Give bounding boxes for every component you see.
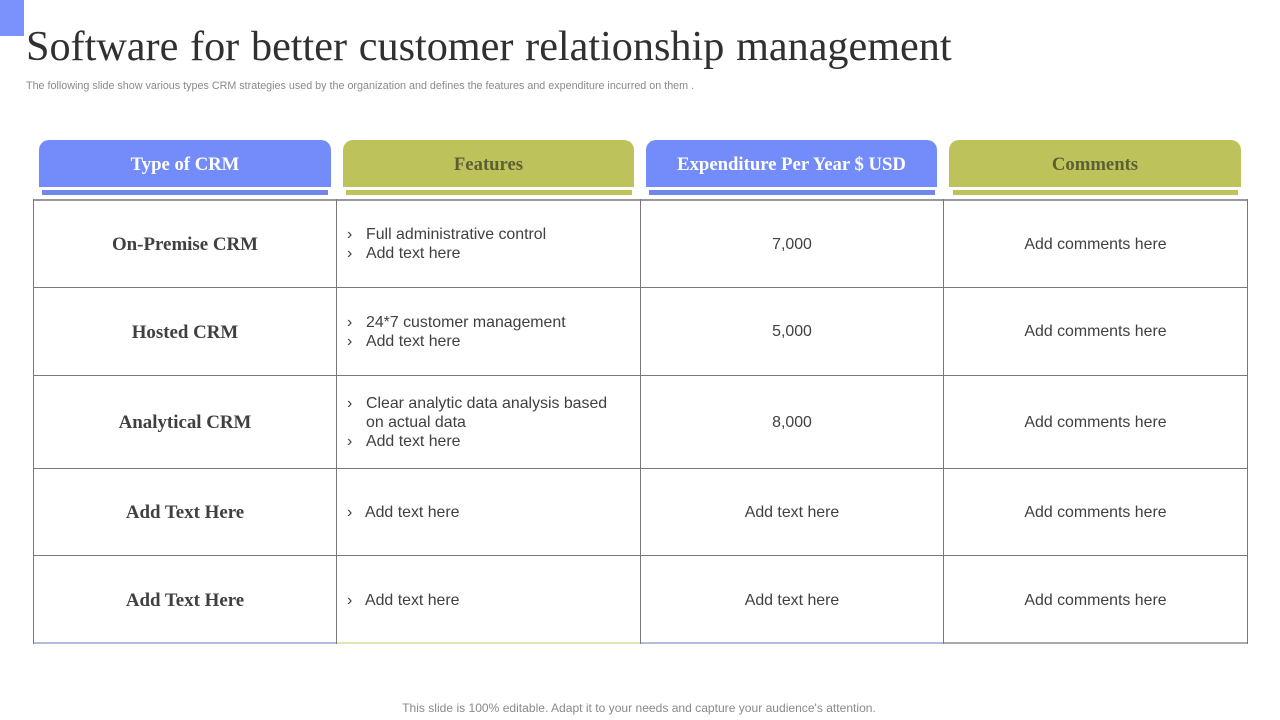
row 1 comments: Add comments here — [1024, 236, 1167, 253]
row 3 comments: Add comments here — [1024, 414, 1167, 431]
header underline: Features — [346, 190, 632, 195]
row 5 expenditure: Add text here — [745, 592, 839, 609]
header underline: Comments — [953, 190, 1238, 195]
header underline: Expenditure — [649, 190, 935, 195]
row 2 features — [347, 314, 566, 350]
row 1 expenditure: 7,000 — [772, 236, 812, 253]
subtitle: The following slide show various types CRM strategies used by the organization and defines the features and expenditure incurred on them . — [26, 80, 694, 92]
row 2 label: Hosted CRM — [132, 322, 238, 343]
corner accent — [0, 0, 24, 36]
header: Features: Features — [454, 154, 523, 175]
row 2 features: › — [347, 314, 352, 331]
row 5 features: Add text here — [365, 592, 460, 609]
header: Comments — [949, 140, 1241, 187]
row 3 expenditure: 8,000 — [772, 414, 812, 431]
row 2 expenditure: 5,000 — [772, 323, 812, 340]
header underline: Type of CRM — [42, 190, 328, 195]
row 1 features: › — [347, 245, 352, 262]
row 2 features: 24*7 customer management — [366, 314, 566, 331]
row 2 features: Add text here — [366, 333, 461, 350]
row 1 features — [347, 226, 546, 262]
row 1 features: Add text here — [366, 245, 461, 262]
row 4 comments: Add comments here — [1024, 504, 1167, 521]
row 3 features: on actual data — [366, 414, 466, 431]
row 4 features: › — [347, 504, 352, 521]
row 4 features: Add text here — [365, 504, 460, 521]
header: Type of CRM — [39, 140, 331, 187]
header: Features — [343, 140, 634, 187]
row 5 comments: Add comments here — [1024, 592, 1167, 609]
header: Type of CRM: Type of CRM — [131, 154, 239, 175]
row 3 features — [347, 395, 607, 450]
footer note: This slide is 100% editable. Adapt it to your needs and capture your audience's attention. — [402, 701, 876, 715]
row 3 features: › — [347, 395, 352, 412]
row 2 features: › — [347, 333, 352, 350]
header: Expenditure Per Year — [646, 140, 937, 187]
row 4 label: Add Text Here — [126, 502, 244, 523]
row 1 label: On-Premise CRM — [112, 234, 258, 255]
row 1 features: Full administrative control — [366, 226, 546, 243]
row 1 features: › — [347, 226, 352, 243]
row 5 label: Add Text Here — [126, 590, 244, 611]
row 3 features: › — [347, 433, 352, 450]
row 2 comments: Add comments here — [1024, 323, 1167, 340]
header: Comments: Comments — [1052, 154, 1138, 175]
header: Expenditure Per Year: Expenditure Per Year $ USD — [677, 154, 906, 175]
row 3 features: Clear analytic data analysis based — [366, 395, 607, 412]
row 5 features: › — [347, 592, 352, 609]
row 4 expenditure: Add text here — [745, 504, 839, 521]
row 3 label: Analytical CRM — [119, 412, 251, 433]
title: Software for better customer relationship management — [26, 23, 952, 70]
row 3 features: Add text here — [366, 433, 461, 450]
